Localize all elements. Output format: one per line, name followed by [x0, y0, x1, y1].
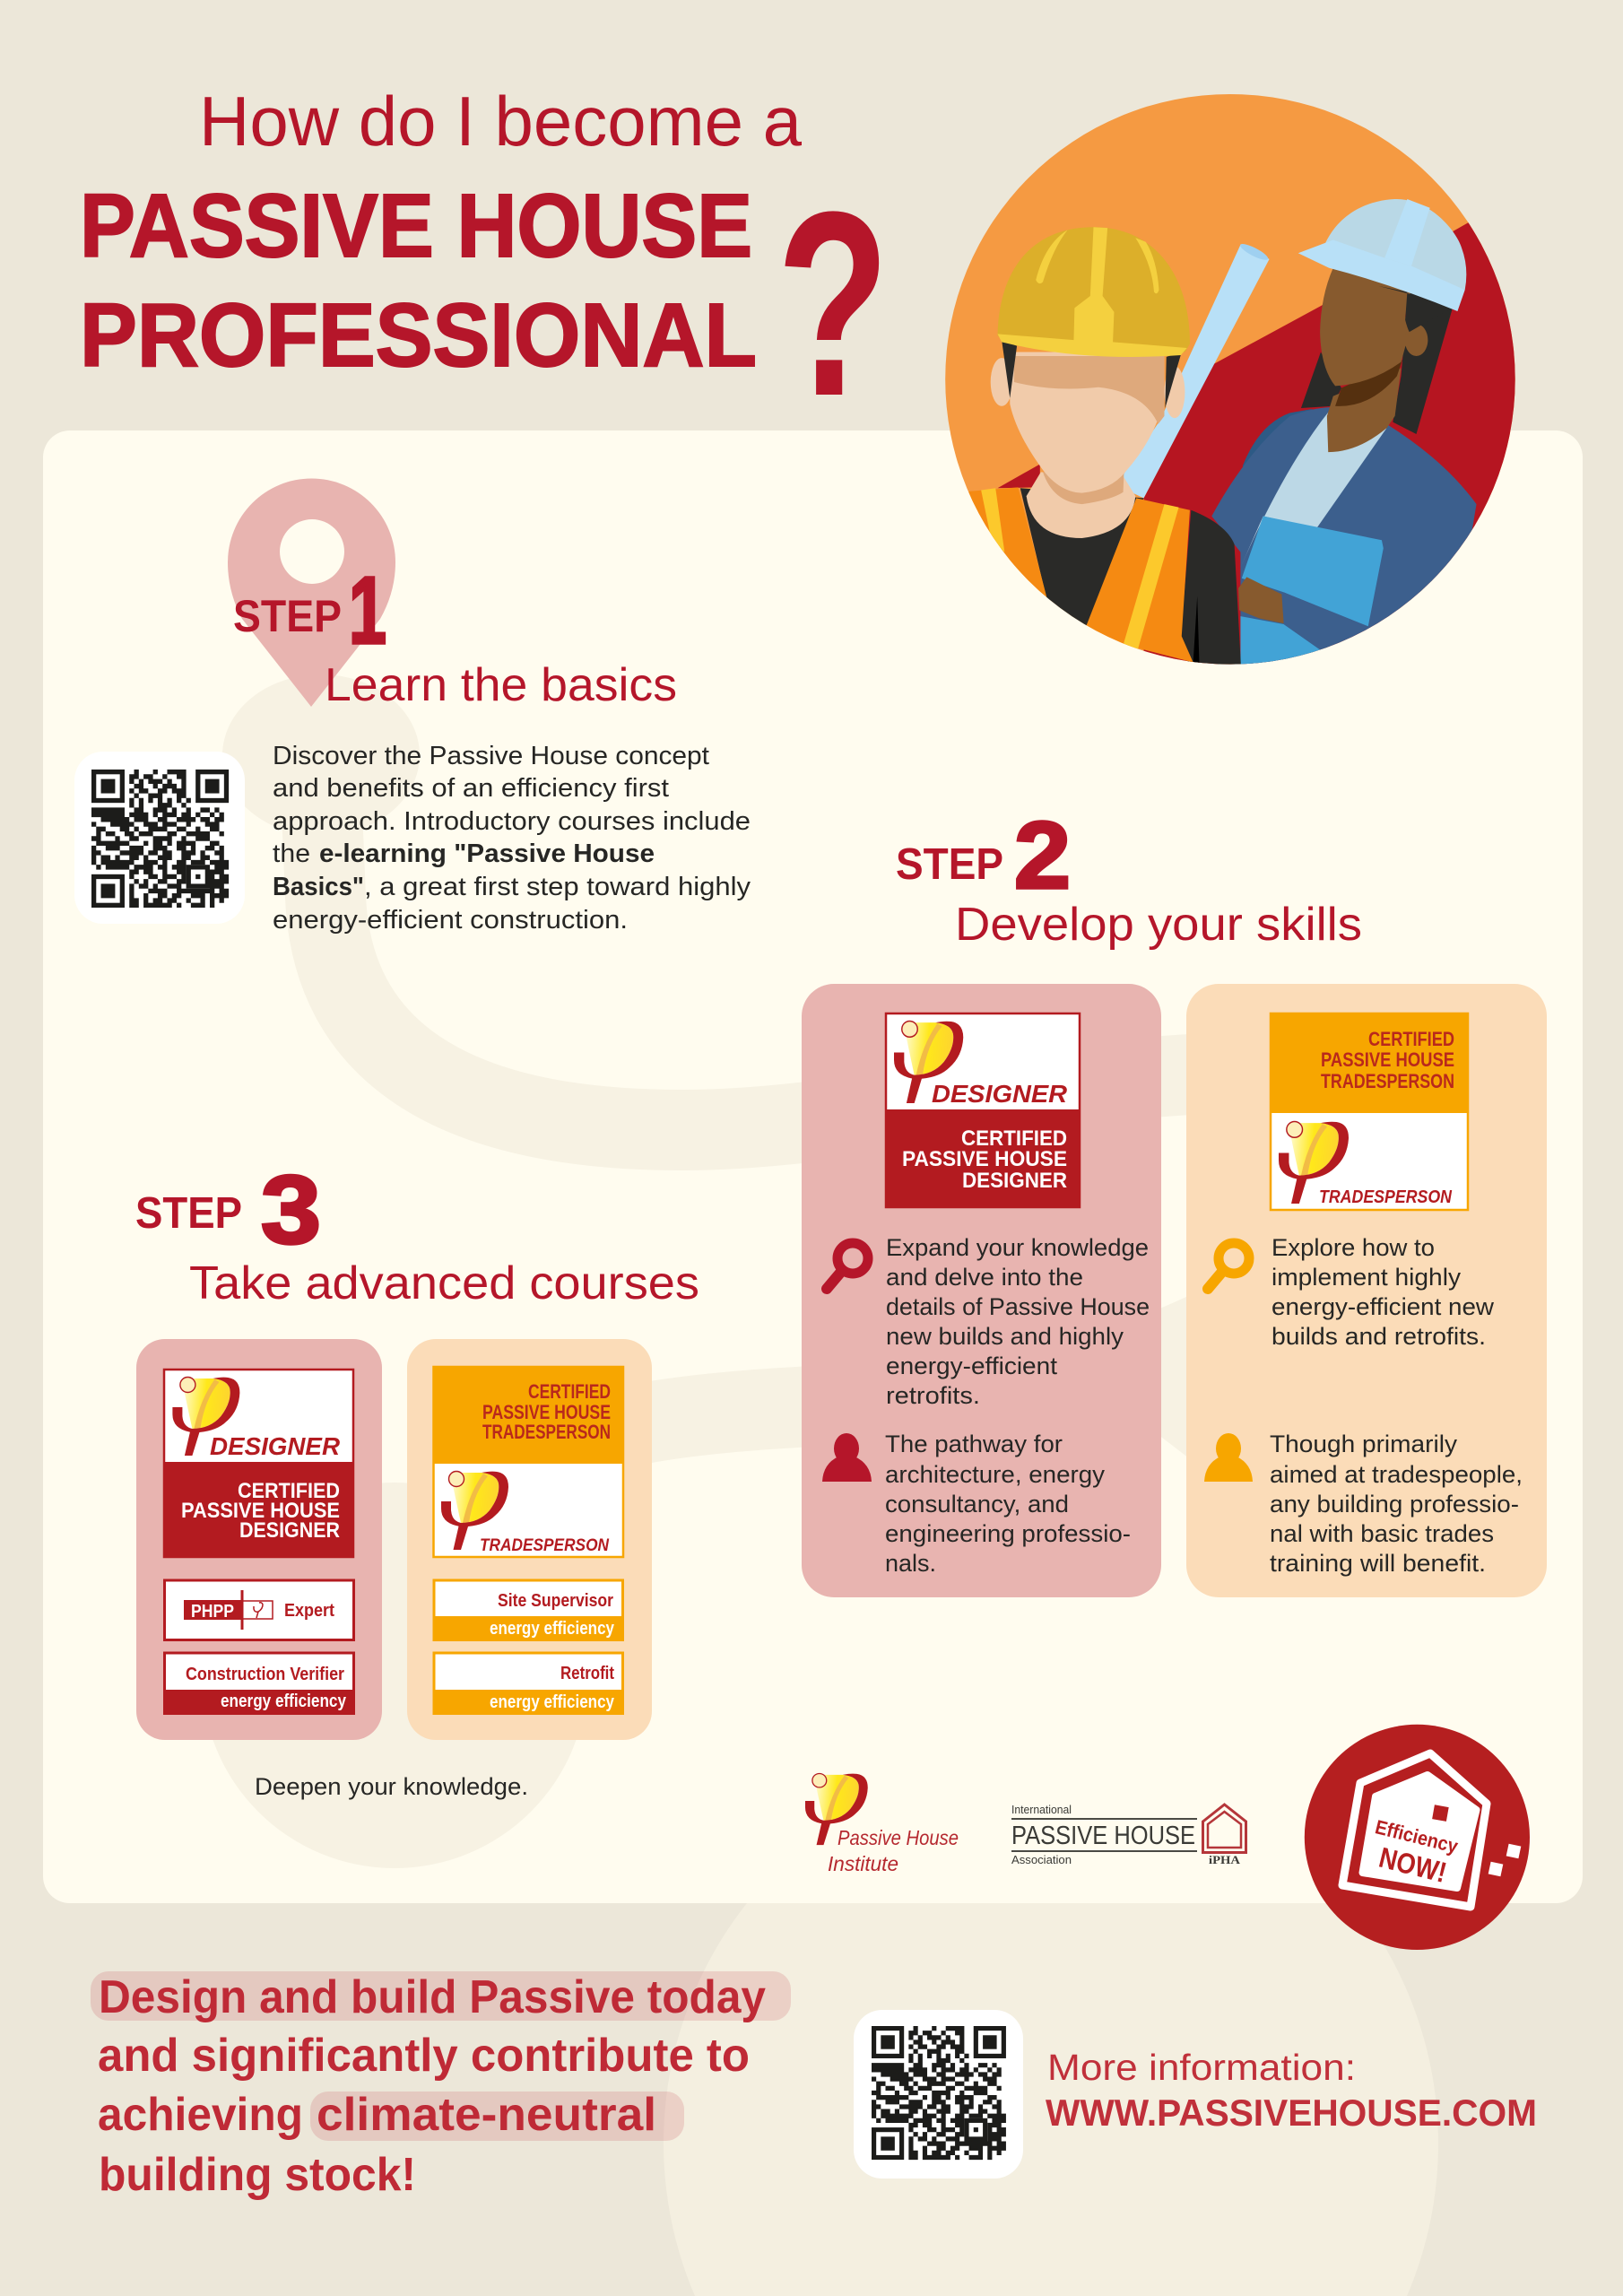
more information: [1046, 2047, 1537, 2134]
step 1 number: 1: [349, 558, 386, 664]
designer text 2: consultancy, and: [885, 1491, 1069, 1518]
tradesperson text 2: any building professio-: [1270, 1491, 1519, 1518]
step 2 number: 2: [1014, 803, 1071, 909]
efficiency label: Efficiency: [1373, 1815, 1461, 1857]
now label: NOW!: [1376, 1841, 1450, 1889]
step 3 heading: Take advanced courses: [189, 1257, 699, 1309]
icon: map pin: [228, 479, 395, 707]
title line 2: PASSIVE HOUSE: [80, 176, 752, 276]
badge: tradesperson: TRADESPERSON: [482, 1421, 611, 1443]
badge: tradesperson: CERTIFIED: [528, 1380, 611, 1403]
badge: designer: DESIGNER: [210, 1432, 341, 1460]
closing text: [98, 1971, 766, 2201]
step 1 body text: energy-efficient construction.: [273, 906, 628, 935]
logo: international passive house association: [1011, 1803, 1246, 1866]
closing text: and significantly contribute to: [98, 2030, 750, 2082]
tradesperson text 1: builds and retrofits.: [1271, 1323, 1486, 1350]
closing text: climate-neutral: [317, 2089, 656, 2141]
badge: certified designer: [885, 1013, 1081, 1208]
badge: site supervisor: [432, 1580, 624, 1641]
badge: construction verifier: [163, 1653, 355, 1715]
logo: international passive house association: iPHA: [1209, 1853, 1241, 1866]
designer text 1: retrofits.: [886, 1382, 980, 1409]
step 1 body text: [273, 742, 751, 935]
icon: person red: [822, 1433, 872, 1482]
step 1 label: STEP: [233, 591, 342, 641]
badge: phpp expert: PHPP: [191, 1602, 234, 1622]
step 3 label: STEP: [135, 1189, 242, 1238]
closing text: building stock!: [99, 2149, 416, 2201]
step 3 caption: Deepen your knowledge.: [255, 1773, 528, 1800]
illustration: two construction professionals: [945, 94, 1515, 665]
badge: certified tradesperson: TRADESPERSON: [1319, 1187, 1452, 1207]
website: WWW.PASSIVEHOUSE.COM: [1046, 2092, 1537, 2134]
badge: phpp expert: [165, 1580, 353, 1639]
background circle: [664, 1756, 1438, 2296]
designer text 1: Expand your knowledge: [886, 1234, 1149, 1261]
designer text 2: The pathway for: [885, 1431, 1063, 1457]
orange background: [938, 88, 1523, 673]
badge: site supervisor: energy efficiency: [490, 1619, 615, 1639]
badge: tradesperson: [432, 1366, 624, 1557]
closing text: Design and build Passive today: [99, 1971, 766, 2023]
designer text 1: [886, 1234, 1150, 1409]
tradesperson text 1: energy-efficient new: [1271, 1293, 1494, 1320]
winding path decoration: [202, 674, 1524, 1868]
badge: designer: PASSIVE HOUSE: [181, 1499, 340, 1523]
logo: international passive house association: PASSIVE HOUSE: [1011, 1822, 1195, 1850]
badge: certified designer: DESIGNER: [932, 1080, 1068, 1108]
highlight 1: [91, 1971, 791, 2021]
woman: [1211, 199, 1476, 664]
step 1 body text: Basics": [273, 873, 364, 901]
highlight 2: [310, 2092, 684, 2141]
logo: passive house institute: [805, 1773, 959, 1875]
logo: passive house institute: Passive House: [838, 1826, 959, 1849]
closing statement: [91, 1971, 791, 2201]
man: [968, 227, 1242, 681]
title line 3: PROFESSIONAL: [80, 285, 757, 386]
step 1 body text: and benefits of an efficiency first: [273, 774, 669, 803]
badge: certified designer: PASSIVE HOUSE: [902, 1147, 1067, 1171]
step 1: [74, 479, 751, 935]
badge: construction verifier: energy efficiency: [221, 1692, 347, 1711]
qr code card 2: [854, 2010, 1023, 2179]
panel: main content: [43, 430, 1583, 1903]
designer text 2: [885, 1431, 1131, 1577]
designer text 1: and delve into the: [886, 1264, 1083, 1291]
badge: phpp expert: Expert: [284, 1601, 334, 1621]
tradesperson text 2: aimed at tradespeople,: [1270, 1461, 1523, 1488]
house window: [1432, 1805, 1449, 1822]
designer text 2: nals.: [885, 1550, 936, 1577]
panel: designer pathway: [802, 984, 1161, 1597]
tradesperson text 2: nal with basic trades: [1270, 1520, 1494, 1547]
question mark: ?: [777, 158, 890, 451]
designer text 1: energy-efficient: [886, 1352, 1058, 1379]
designer text 2: architecture, energy: [885, 1461, 1106, 1488]
tradesperson text 2: [1270, 1431, 1523, 1577]
house fill: [1363, 1775, 1476, 1888]
tradesperson text 2: training will benefit.: [1270, 1550, 1486, 1577]
tradesperson text 2: Though primarily: [1270, 1431, 1458, 1457]
step 3 number: 3: [261, 1155, 321, 1264]
step 2 heading: Develop your skills: [955, 899, 1362, 951]
step 1 body text: Discover the Passive House concept: [273, 742, 709, 770]
logo: international passive house association: International: [1011, 1803, 1072, 1816]
panel: tradesperson pathway: [1186, 984, 1547, 1597]
designer text 2: engineering professio-: [885, 1520, 1131, 1547]
panel: tradesperson advanced: [407, 1339, 652, 1740]
icon: magnifier orange: [1208, 1243, 1249, 1289]
step 1 body text: , a great first step toward highly: [364, 873, 751, 901]
title line 1: How do I become a: [199, 82, 803, 161]
more information label: More information:: [1047, 2047, 1356, 2088]
badge: certified tradesperson: TRADESPERSON: [1321, 1070, 1454, 1092]
title: [80, 82, 890, 451]
badge: retrofit: [432, 1653, 624, 1715]
blueprint roll: [1123, 241, 1270, 498]
step 2 label: STEP: [896, 840, 1003, 889]
step 1 body text: the: [273, 839, 310, 868]
badge: designer: [163, 1370, 354, 1558]
tradesperson text 1: implement highly: [1271, 1264, 1462, 1291]
badge: certified designer: DESIGNER: [962, 1169, 1067, 1193]
tradesperson text 1: [1271, 1234, 1494, 1350]
designer text 1: details of Passive House: [886, 1293, 1150, 1320]
small window squares: [1488, 1844, 1521, 1876]
step 1 body text: e-learning "Passive House: [319, 839, 655, 868]
badge: tradesperson: TRADESPERSON: [480, 1536, 610, 1555]
closing text: achieving: [98, 2089, 303, 2141]
badge: certified designer: CERTIFIED: [961, 1126, 1067, 1151]
logo: international passive house association: Association: [1011, 1853, 1072, 1866]
qr code card 1: [74, 752, 245, 924]
badge: designer: DESIGNER: [239, 1518, 340, 1543]
step 2: [802, 803, 1547, 1597]
badge: certified tradesperson: CERTIFIED: [1368, 1028, 1454, 1050]
designer text 1: new builds and highly: [886, 1323, 1124, 1350]
icon: magnifier red: [827, 1243, 868, 1289]
step 1 body text: approach. Introductory courses include: [273, 807, 751, 836]
tradesperson text 1: Explore how to: [1271, 1234, 1435, 1261]
badge: construction verifier: Construction Verifier: [186, 1665, 344, 1684]
badge: certified tradesperson: PASSIVE HOUSE: [1321, 1048, 1454, 1071]
badge: tradesperson: PASSIVE HOUSE: [482, 1401, 611, 1423]
panel: designer advanced: [136, 1339, 382, 1740]
badge: retrofit: energy efficiency: [490, 1692, 615, 1712]
red background: [1144, 220, 1539, 673]
logo: passive house institute: Institute: [828, 1852, 898, 1875]
badge: retrofit: Retrofit: [560, 1664, 614, 1683]
icon: person orange: [1204, 1433, 1253, 1482]
step 1 heading: Learn the basics: [325, 659, 677, 711]
badge: efficiency now: [1305, 1725, 1530, 1950]
badge: site supervisor: Site Supervisor: [498, 1591, 613, 1611]
step 3: [135, 1155, 699, 1800]
badge: designer: CERTIFIED: [238, 1479, 340, 1503]
badge: certified tradesperson: [1270, 1013, 1469, 1210]
house outline: [1342, 1753, 1487, 1907]
